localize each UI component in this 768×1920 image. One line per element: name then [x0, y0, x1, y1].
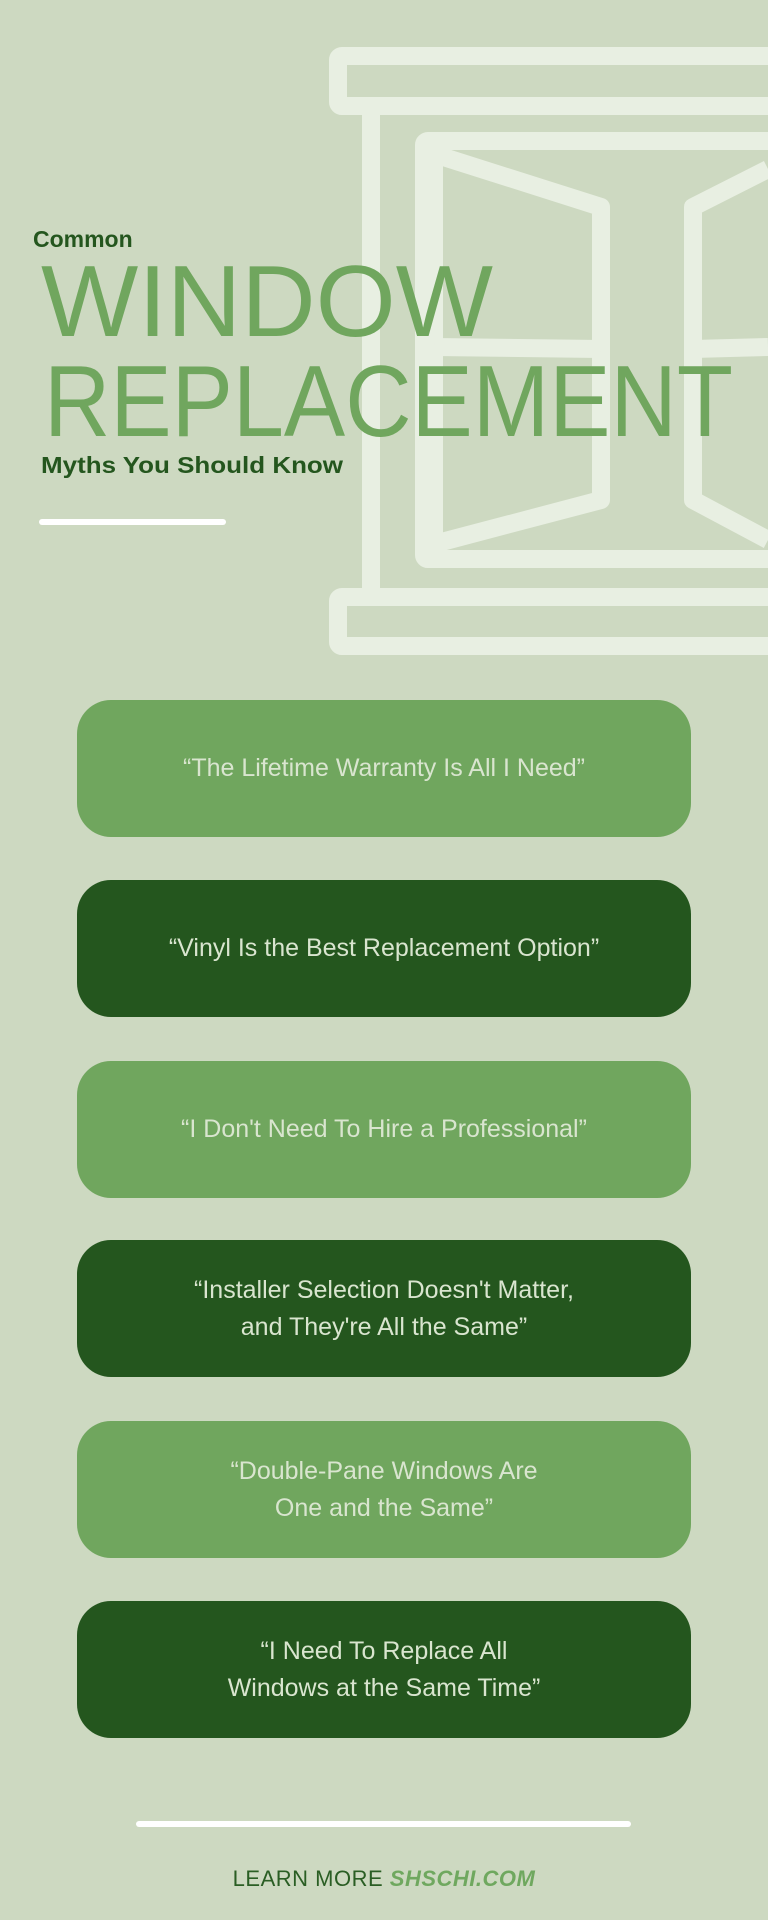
- myth 4: “Installer Selection Doesn't Matter,: [194, 1276, 574, 1304]
- footer text: LEARN MORE SHSCHI.COM: [233, 1866, 535, 1891]
- window illustration: [329, 47, 768, 655]
- myth 3: “I Don't Need To Hire a Professional”: [181, 1115, 587, 1143]
- title: [33, 226, 733, 525]
- myth 2: [77, 880, 691, 1017]
- title: Myths You Should Know: [41, 452, 343, 478]
- myth 6: Windows at the Same Time”: [228, 1674, 540, 1702]
- myth 5: [77, 1421, 691, 1558]
- myth 4: and They're All the Same”: [241, 1312, 527, 1340]
- title: WINDOW: [41, 246, 493, 358]
- myth 4: [77, 1240, 691, 1377]
- myth 3: [77, 1061, 691, 1198]
- myth 5: One and the Same”: [275, 1494, 493, 1522]
- myth 6: “I Need To Replace All: [261, 1636, 507, 1664]
- myth 2: “Vinyl Is the Best Replacement Option”: [169, 934, 599, 962]
- footer line: [136, 1821, 631, 1827]
- title: Common: [33, 226, 133, 252]
- myth 5: “Double-Pane Windows Are: [230, 1456, 538, 1484]
- myth 1: [77, 700, 691, 837]
- myth 1: “The Lifetime Warranty Is All I Need”: [183, 754, 585, 782]
- myth 6: [77, 1601, 691, 1738]
